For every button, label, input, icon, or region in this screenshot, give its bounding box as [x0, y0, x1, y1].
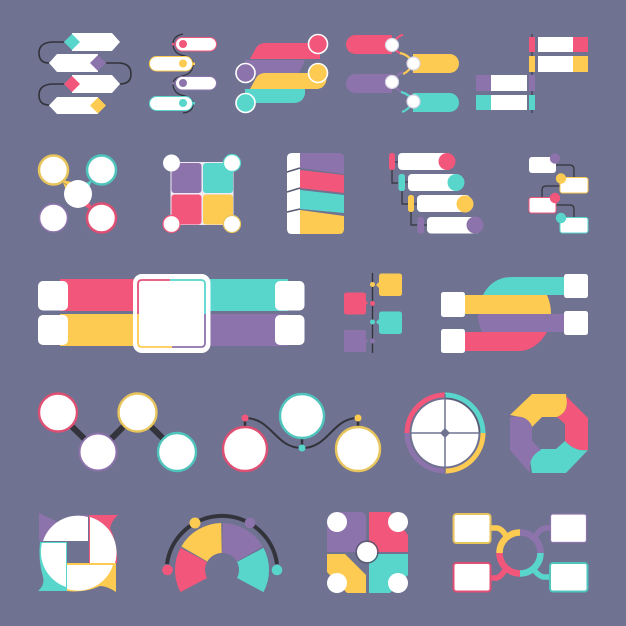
- panel: pills joined by forked nodes: [346, 34, 459, 112]
- panel: ring with four boxes: [454, 514, 588, 592]
- panel: crossing flow bands: [441, 274, 588, 353]
- panel: segmented ring pie: [407, 394, 483, 473]
- panel: staggered bars on axis: [476, 34, 588, 113]
- panel: zigzag circle chain: [39, 394, 196, 471]
- panel: semicircular gauge: [162, 516, 282, 592]
- panel: hub and four circles: [39, 156, 116, 232]
- panel: four square grid with corner dots: [163, 154, 240, 232]
- panel: octagon ring: [510, 394, 588, 473]
- panel: wave line with circles: [223, 394, 380, 471]
- panel: linked flow boxes: [529, 153, 588, 233]
- panel: pinwheel circle: [38, 513, 118, 592]
- panel: arrow tags with connectors: [39, 33, 131, 114]
- panel: timeline with callout squares: [344, 273, 402, 353]
- panel: stacked book layers: [287, 153, 344, 234]
- panel: four quadrant square with dots: [327, 512, 408, 593]
- panel: stepped tabs with circles: [389, 153, 484, 234]
- panel: central frame with four bands: [38, 274, 304, 353]
- panel: pills on wavy line: [150, 34, 216, 113]
- panel: overlapping slanted bands: [236, 34, 328, 112]
